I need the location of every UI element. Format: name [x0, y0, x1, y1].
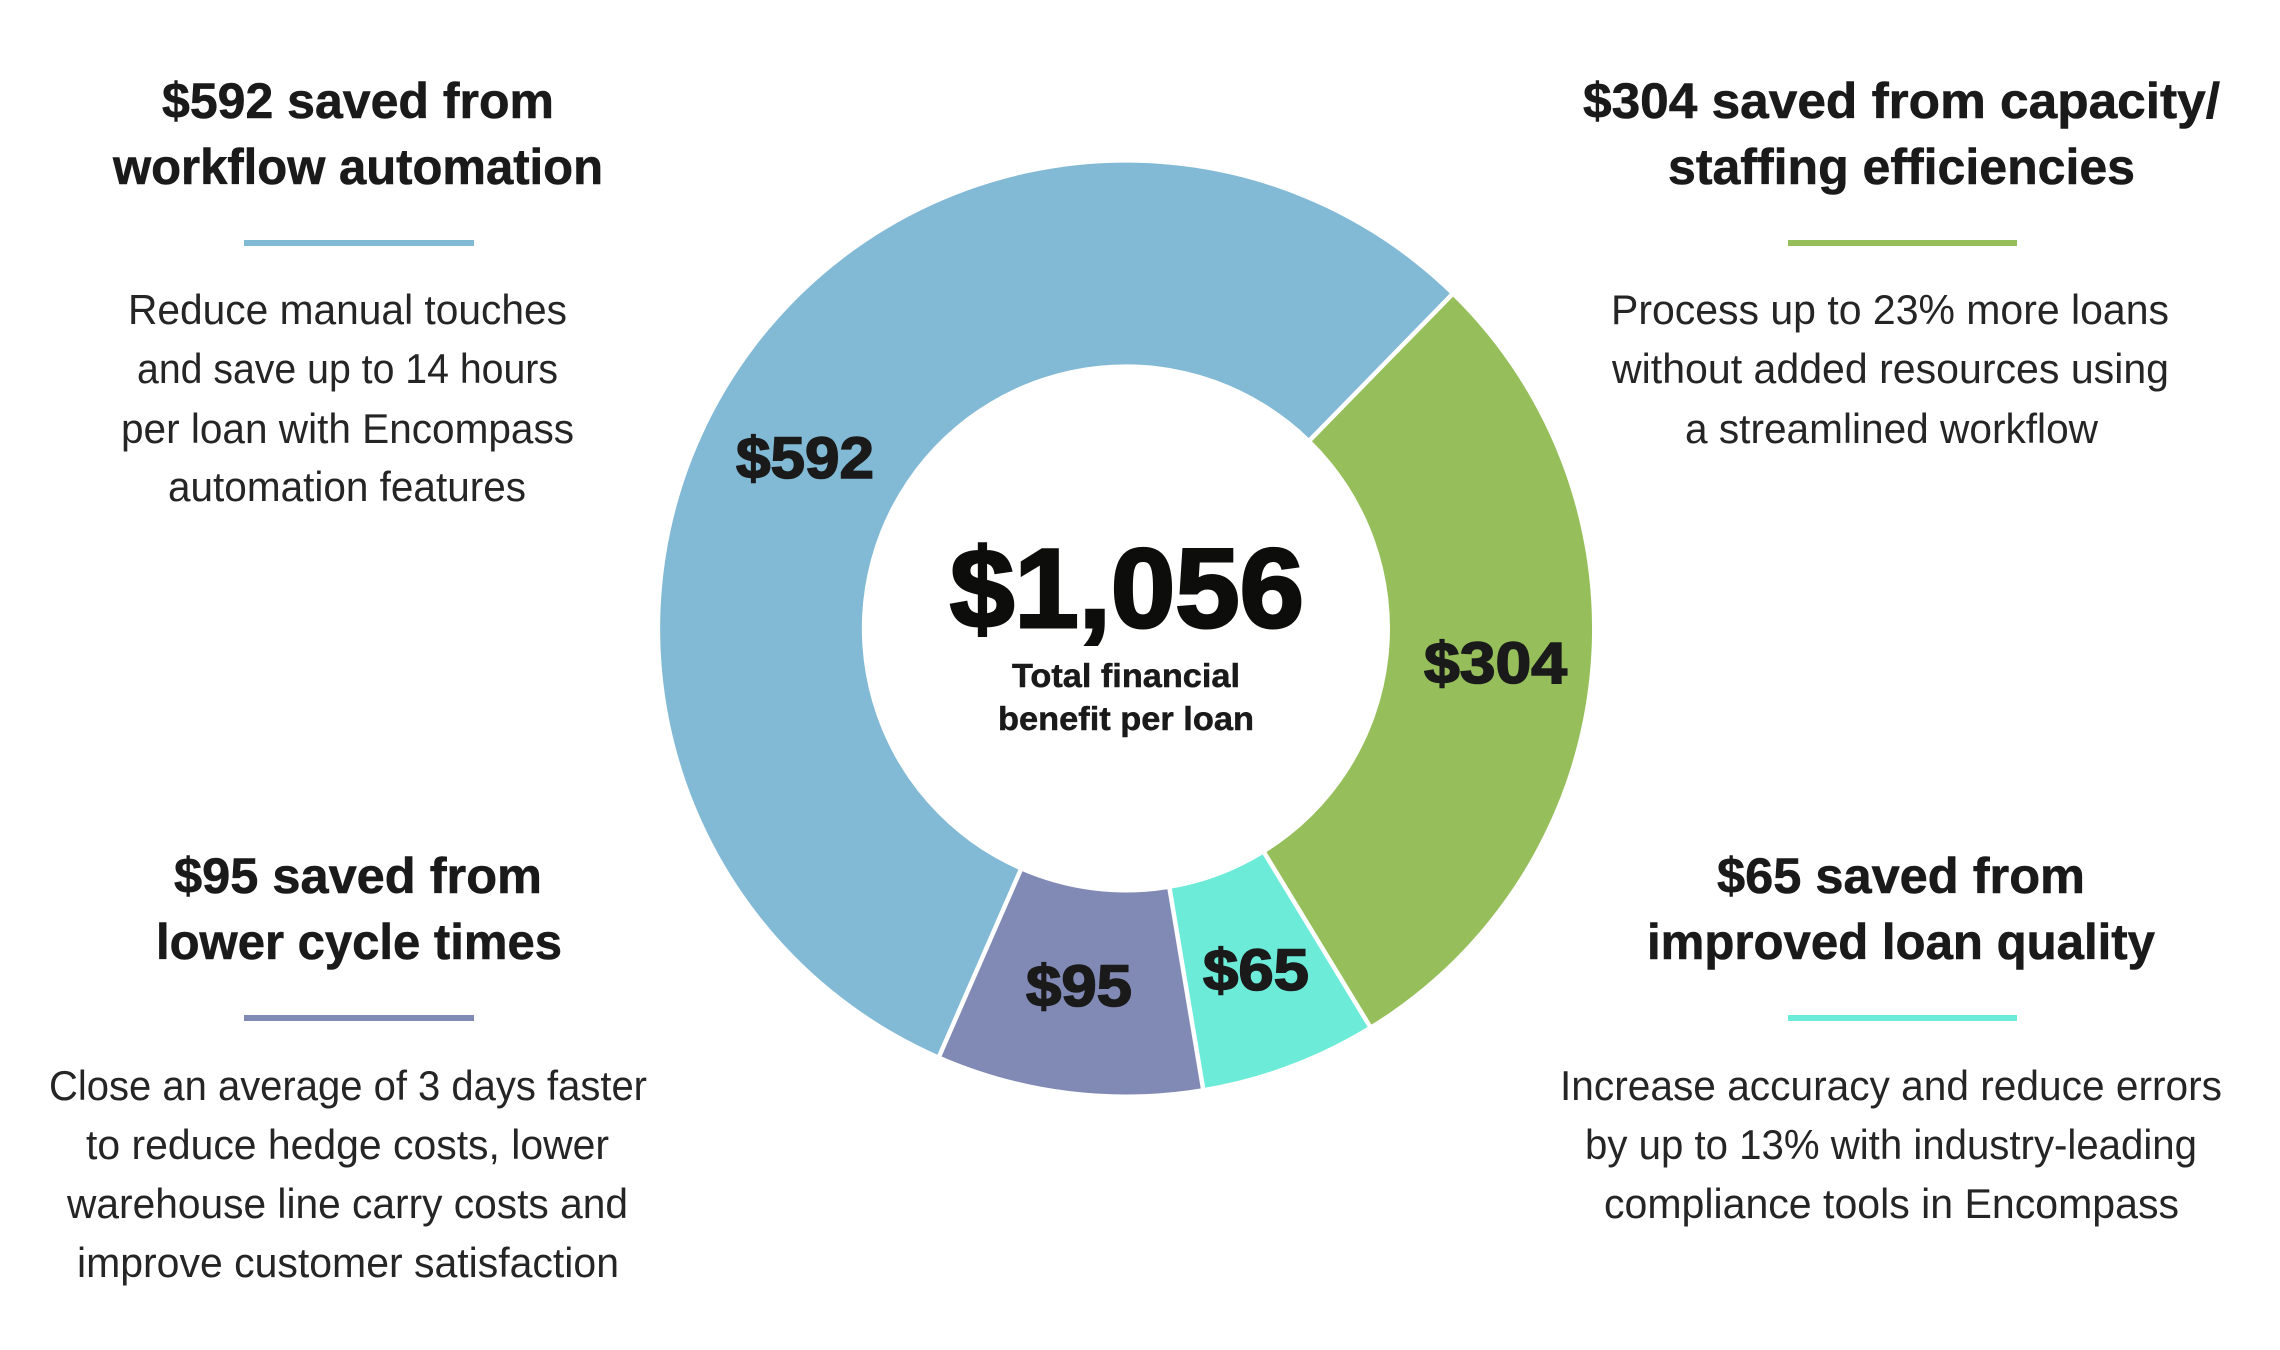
heading: $304 saved from capacity/: [1583, 73, 2220, 129]
body text: per loan with Encompass: [121, 405, 574, 452]
center total: [950, 526, 1304, 737]
heading: $592 saved from: [162, 73, 554, 129]
heading: $65 saved from: [1717, 848, 2085, 904]
value label: $95: $95: [1026, 954, 1132, 1019]
total caption: Total financial: [1012, 657, 1240, 694]
body text: Close an average of 3 days faster: [49, 1062, 647, 1109]
heading: lower cycle times: [156, 914, 562, 970]
value label: $304: $304: [1424, 631, 1567, 696]
body text: [1611, 286, 2169, 452]
value label: $592: $592: [736, 426, 874, 491]
segment: $95 cycle times: [940, 870, 1203, 1095]
body text: without added resources using: [1611, 345, 2169, 392]
heading: workflow automation: [112, 139, 603, 195]
body text: automation features: [168, 463, 526, 510]
value label: $65: $65: [1203, 938, 1309, 1003]
segment: $592 workflow automation: [660, 163, 1452, 1056]
body text: [1560, 1062, 2222, 1227]
accent rule: [1788, 240, 2017, 246]
body text: by up to 13% with industry-leading: [1585, 1121, 2197, 1168]
heading: improved loan quality: [1647, 914, 2155, 970]
heading: $95 saved from: [174, 848, 542, 904]
body text: improve customer satisfaction: [77, 1239, 619, 1286]
body text: to reduce hedge costs, lower: [86, 1121, 609, 1168]
panel: workflow automation: [112, 73, 603, 510]
body text: Increase accuracy and reduce errors: [1560, 1062, 2222, 1109]
panel: capacity and staffing: [1583, 73, 2220, 452]
segment: $65 loan quality: [1170, 853, 1370, 1088]
total caption: benefit per loan: [998, 700, 1254, 737]
segment: $304 capacity and staffing: [1265, 295, 1592, 1026]
body text: compliance tools in Encompass: [1604, 1180, 2179, 1227]
body text: Process up to 23% more loans: [1611, 286, 2169, 333]
body text: and save up to 14 hours: [137, 345, 558, 392]
accent rule: [1788, 1015, 2017, 1021]
body text: Reduce manual touches: [128, 286, 567, 333]
total caption: [998, 657, 1254, 737]
donut chart: [660, 163, 1592, 1095]
panel: cycle times: [49, 848, 647, 1286]
body text: a streamlined workflow: [1685, 405, 2099, 452]
heading: staffing efficiencies: [1668, 139, 2135, 195]
panel: loan quality: [1560, 848, 2222, 1227]
body text: [49, 1062, 647, 1286]
body text: warehouse line carry costs and: [66, 1180, 628, 1227]
heading: [1583, 73, 2220, 195]
body text: [121, 286, 574, 510]
accent rule: [244, 240, 474, 246]
heading: [156, 848, 562, 970]
accent rule: [244, 1015, 474, 1021]
heading: [1647, 848, 2155, 970]
heading: [112, 73, 603, 195]
total amount: $1,056: [950, 526, 1304, 651]
